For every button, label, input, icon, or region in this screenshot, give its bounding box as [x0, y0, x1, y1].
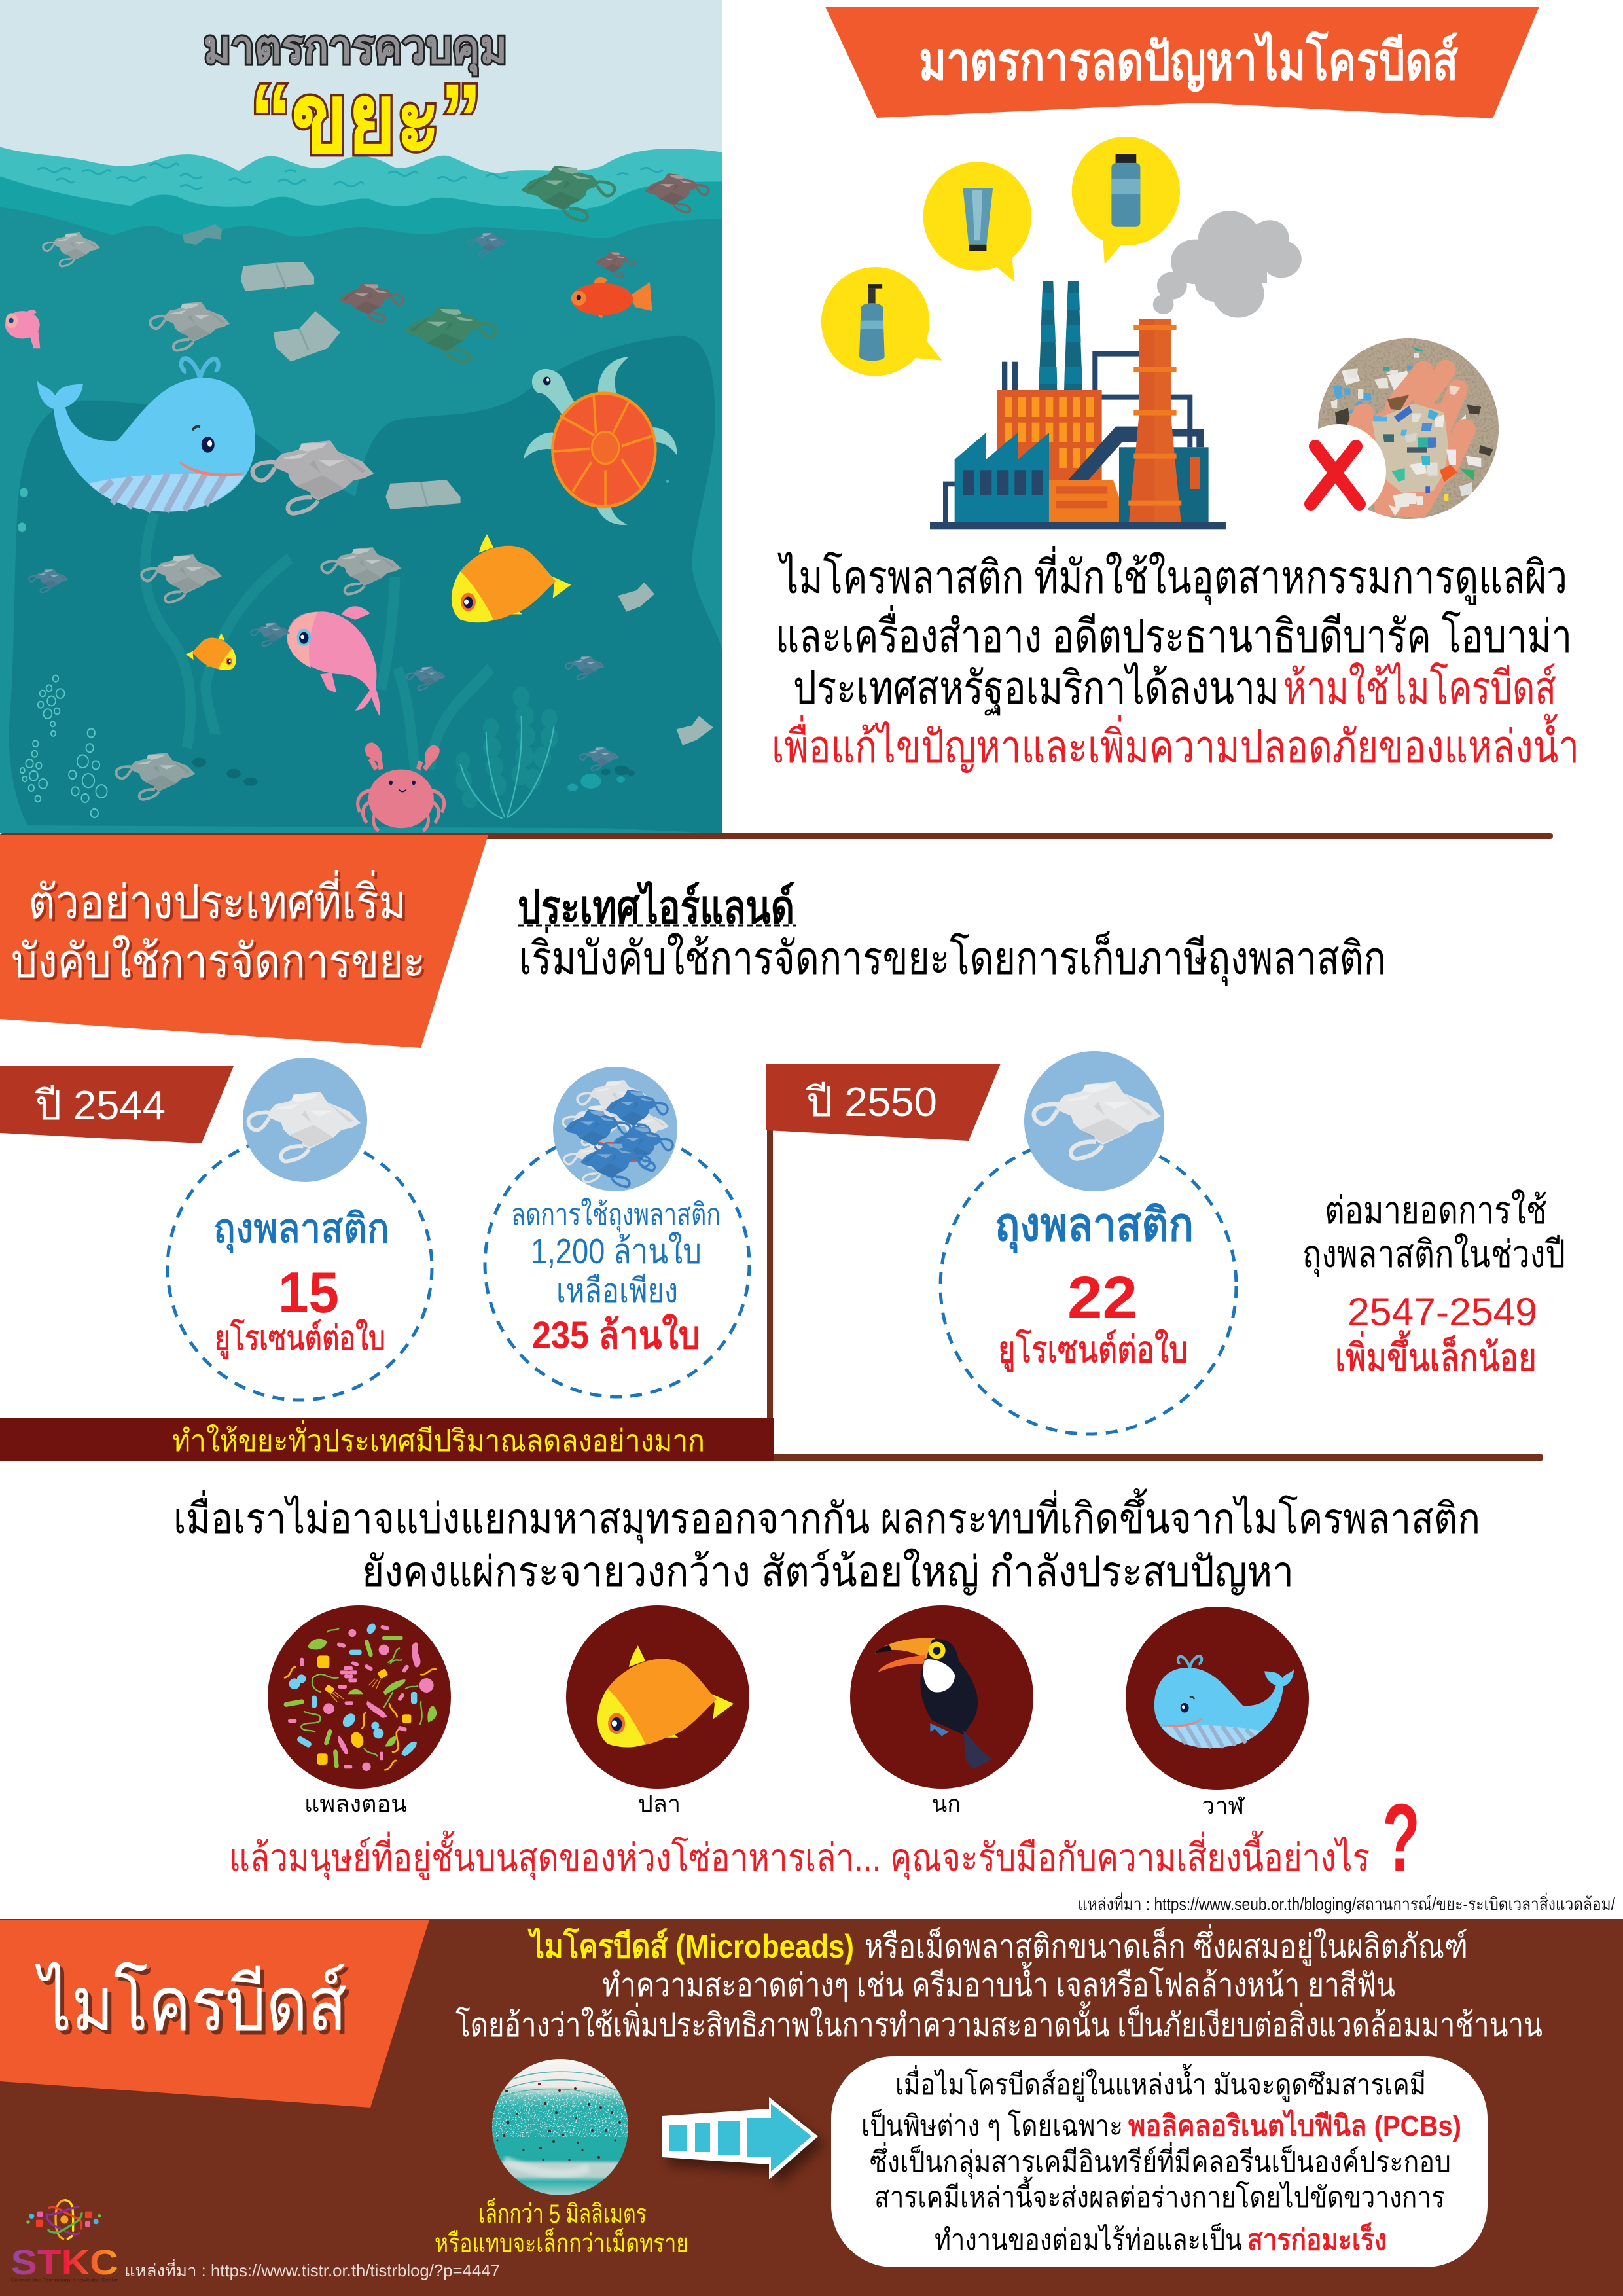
year banner 2550: ปี 2550	[805, 1080, 937, 1125]
card: usage reduced: ลดการใช้ถุงพลาสติก	[511, 1197, 721, 1233]
icon: pile of bags	[553, 1067, 677, 1191]
animal labels: ปลา	[638, 1790, 681, 1817]
heading: microbeads: ไมโครบีดส์	[39, 1965, 351, 2051]
bubble: pump bottle	[821, 267, 942, 376]
logo: STKC	[11, 2200, 119, 2282]
icon: plankton	[268, 1605, 451, 1789]
text block: microbeads definition	[455, 1924, 1543, 2043]
icon: fish in circle	[566, 1605, 749, 1789]
card: usage reduced: เหลือเพียง	[556, 1272, 678, 1310]
text block: microbeads definition: ทำความสะอาดต่างๆ เช่น ครีมอาบน้ำ เจลหรือโฟลล้างหน้า ยาสีฟัน	[602, 1962, 1395, 2003]
card: bag price 15 euro cents	[168, 1058, 432, 1400]
callout: microbeads absorb chemicals: เป็นพิษต่าง ๆ โดยเฉพาะ	[861, 2109, 1123, 2142]
heading: microbeads	[0, 1920, 429, 2108]
panel: microbeads	[0, 1919, 1623, 2296]
caption: size of microbeads: เล็กกว่า 5 มิลลิเมตร	[478, 2198, 647, 2229]
callout: microbeads absorb chemicals: เมื่อไมโครบีดส์อยู่ในแหล่งน้ำ มันจะดูดซึมสารเคมี	[895, 2064, 1426, 2102]
text block: Ireland	[518, 880, 1386, 986]
caption: size of microbeads: หรือแทบจะเล็กกว่าเม็ดทราย	[435, 2227, 688, 2258]
logo: STKC: STKC	[11, 2244, 118, 2282]
text block: usage trend	[1302, 1189, 1565, 1379]
text block: microbeads definition: ไมโครบีดส์ (Microbeads)	[527, 1927, 854, 1965]
year banner 2544: ปี 2544	[34, 1083, 166, 1128]
water ripples	[37, 164, 663, 189]
section divider top	[0, 833, 1553, 839]
card: bag price 22 euro cents: 22	[1067, 1265, 1137, 1331]
orange building	[997, 390, 1102, 482]
card: bag price 22 euro cents: ยูโรเซนต์ต่อใบ	[998, 1329, 1188, 1372]
text block: impact intro: เมื่อเราไม่อาจแบ่งแยกมหาสมุทรออกจากกัน ผลกระทบที่เกิดขึ้นจากไมโครพลาสติก	[173, 1488, 1480, 1544]
microplastics photo with red X	[1304, 338, 1499, 519]
section heading: example countries: บังคับใช้การจัดการขยะ	[14, 937, 428, 990]
question callout: ?	[1382, 1784, 1420, 1892]
section heading: example countries	[0, 835, 488, 1048]
section heading: example countries: ตัวอย่างประเทศที่เริ่ม	[31, 872, 409, 931]
ocean scene	[0, 147, 722, 833]
card: bag price 15 euro cents: ยูโรเซนต์ต่อใบ	[215, 1319, 385, 1359]
panel title	[203, 34, 506, 157]
callout: microbeads absorb chemicals: ซึ่งเป็นกลุ่มสารเคมีอินทรีย์ที่มีคลอรีนเป็นองค์ประกอบ	[870, 2142, 1451, 2179]
text block: usage trend: เพิ่มขึ้นเล็กน้อย	[1335, 1331, 1537, 1379]
animal labels: นก	[932, 1790, 961, 1817]
annex	[1049, 480, 1128, 522]
card: bag price 15 euro cents: 15	[278, 1260, 339, 1325]
text block: microplastics ban: ประเทศสหรัฐอเมริกาได้ลงนาม	[793, 662, 1279, 715]
icon: toucan in circle	[850, 1605, 1033, 1789]
caption: size of microbeads	[435, 2198, 688, 2258]
crab	[358, 742, 444, 831]
result bar: ทำให้ขยะทั่วประเทศมีปริมาณลดลงอย่างมาก	[172, 1420, 705, 1458]
card: usage reduced	[485, 1067, 749, 1397]
arrow	[662, 2097, 825, 2187]
bubble: tube	[923, 162, 1031, 282]
whale	[37, 359, 255, 511]
text block: Ireland: เริ่มบังคับใช้การจัดการขยะโดยการเก็บภาษีถุงพลาสติก	[519, 927, 1386, 986]
text block: usage trend: ถุงพลาสติกในช่วงปี	[1302, 1232, 1565, 1278]
big orange fish	[452, 534, 571, 622]
white cut-out and X mark	[1292, 424, 1386, 518]
card: bag price 22 euro cents: ถุงพลาสติก	[995, 1199, 1194, 1253]
heading ribbon: microbead measures: มาตรการลดปัญหาไมโครบีดส์	[919, 30, 1458, 92]
card: usage reduced: 235 ล้านใบ	[532, 1313, 700, 1357]
year banner 2544	[0, 1066, 234, 1143]
result bar	[0, 1418, 774, 1461]
text block: usage trend: 2547-2549	[1347, 1290, 1537, 1334]
timeline lines for 2550	[767, 1129, 1543, 1461]
question callout: แล้วมนุษย์ที่อยู่ชั้นบนสุดของห่วงโซ่อาหารเล่า... คุณจะรับมือกับความเสี่ยงนี้อย่างไร	[229, 1831, 1370, 1881]
callout: microbeads absorb chemicals: สารเคมีเหล่านี้จะส่งผลต่อร่างกายโดยไปขัดขวางการ	[874, 2176, 1445, 2214]
seaweed shadows	[145, 513, 491, 775]
text block: microplastics ban	[772, 546, 1579, 773]
turtle	[524, 357, 677, 525]
year banner 2550	[766, 1064, 1001, 1141]
sky background	[0, 0, 722, 833]
callout: microbeads absorb chemicals	[831, 2056, 1488, 2267]
callout: microbeads absorb chemicals: ทำงานของต่อมไร้ท่อและเป็น	[935, 2223, 1242, 2256]
smoke cloud	[1153, 211, 1302, 318]
animal labels	[304, 1790, 1245, 1819]
heading: microbeads: ไมโครบีดส์	[35, 1962, 347, 2047]
text block: impact intro: ยังคงแผ่กระจายวงกว้าง สัตว์น้อยใหญ่ กำลังประสบปัญหา	[362, 1548, 1294, 1595]
text block: impact intro	[173, 1488, 1480, 1595]
tall stack	[1129, 319, 1181, 522]
icon: plastic bag	[1024, 1051, 1164, 1191]
icon: plastic bag	[243, 1058, 367, 1182]
card: usage reduced: 1,200 ล้านใบ	[531, 1231, 702, 1271]
logo: STKC: Science and Technology Knowledge Center	[11, 2278, 119, 2282]
plastic pile	[1372, 404, 1448, 493]
text block: microbeads definition: หรือเม็ดพลาสติกขนาดเล็ก ซึ่งผสมอยู่ในผลิตภัณฑ์	[865, 1924, 1468, 1966]
saw-tooth hall	[955, 433, 1049, 522]
seaweed	[455, 687, 558, 819]
animal labels: แพลงตอน	[304, 1790, 407, 1817]
panel: ocean illustration	[0, 0, 722, 833]
section heading: example countries: ตัวอย่างประเทศที่เริ่ม	[28, 870, 406, 929]
icon: whale in circle	[1126, 1607, 1309, 1790]
side block	[1119, 447, 1209, 522]
beach debris	[1342, 368, 1466, 420]
heading ribbon: microbead measures	[825, 7, 1539, 118]
red fish	[571, 277, 652, 319]
photo: microbeads dish	[491, 2059, 630, 2195]
bubbles	[20, 675, 107, 817]
pink fish	[287, 606, 380, 716]
factory illustration	[930, 281, 1226, 529]
speech bubbles with cosmetics	[821, 137, 1302, 376]
bubble: bottle	[1072, 137, 1180, 264]
dark pebbles	[192, 758, 635, 786]
small pink fish	[5, 310, 40, 348]
card: bag price 22 euro cents	[940, 1051, 1236, 1434]
text block: usage trend: ต่อมายอดการใช้	[1325, 1189, 1547, 1232]
callout: microbeads absorb chemicals: สารก่อมะเร็ง	[1247, 2222, 1387, 2256]
panel title: “ขยะ”	[250, 63, 482, 173]
text block: Ireland: ประเทศไอร์แลนด์	[518, 880, 794, 933]
plastic bags	[29, 166, 709, 800]
source note: แหล่งที่มา : https://www.tistr.or.th/tistrblog/?p=4447	[124, 2259, 500, 2280]
fingers and palm	[1353, 370, 1465, 469]
section heading: example countries: บังคับใช้การจัดการขยะ	[11, 935, 425, 988]
question callout	[229, 1784, 1420, 1892]
foam boxes	[241, 262, 713, 745]
card: bag price 15 euro cents: ถุงพลาสติก	[213, 1206, 389, 1253]
small orange fish	[186, 633, 236, 670]
callout: microbeads absorb chemicals: พอลิคลอริเนตไบฟีนิล (PCBs)	[1128, 2109, 1461, 2142]
panel title: มาตรการควบคุม	[204, 22, 507, 76]
twin chimneys	[1039, 281, 1082, 391]
animal labels: วาฬ	[1202, 1792, 1245, 1819]
